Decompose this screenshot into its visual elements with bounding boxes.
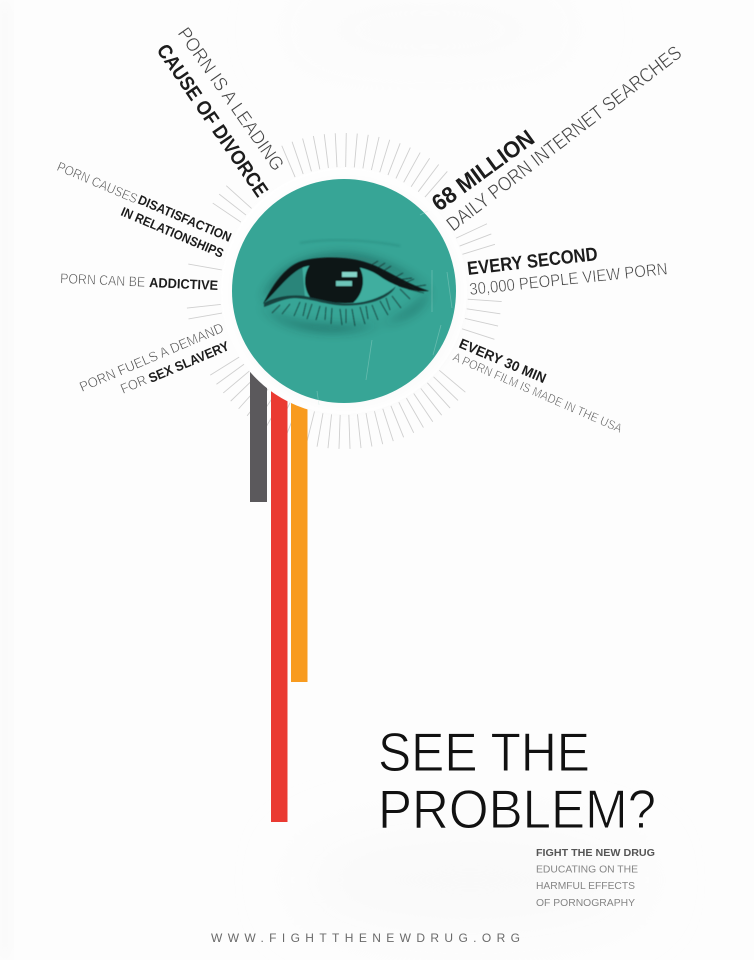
stat: addictive: PORN CAN BE: [60, 270, 145, 290]
stat: addictive: ADDICTIVE: [149, 275, 218, 293]
lashes: [272, 261, 426, 326]
organisation tagline: OF PORNOGRAPHY: [536, 897, 635, 909]
stat: every second: 30,000 PEOPLE VIEW PORN: [468, 259, 668, 299]
stat: sex slavery: FOR: [118, 371, 149, 397]
lower lid: [264, 286, 396, 307]
stat: every 30 min: A PORN FILM IS MADE IN THE USA: [451, 350, 625, 436]
organisation tagline: EDUCATING ON THE: [536, 864, 638, 876]
icon: eye: [262, 240, 432, 331]
stat: sex slavery: SEX SLAVERY: [146, 338, 231, 386]
organisation tagline: [536, 847, 655, 909]
website url: WWW.FIGHTTHENEWDRUG.ORG: [211, 931, 520, 945]
bar: gray: [250, 360, 267, 502]
title: PROBLEM?: [378, 778, 656, 840]
stat: porn is a leading cause of divorce: CAUSE OF DIVORCE: [152, 40, 272, 201]
drip bars: [250, 360, 308, 822]
stat: addictive: [60, 270, 218, 293]
organisation tagline: FIGHT THE NEW DRUG: [536, 847, 655, 859]
stat: 68 million: DAILY PORN INTERNET SEARCHES: [443, 42, 686, 236]
title: [378, 721, 656, 840]
upper lid: [263, 257, 429, 304]
disc scratches: [317, 211, 452, 405]
stat: dissatisfaction in relationships: PORN CAUSES: [55, 159, 140, 206]
bar: orange: [291, 395, 308, 682]
stat: dissatisfaction in relationships: [55, 159, 234, 261]
title: SEE THE: [378, 721, 590, 783]
bar: red: [271, 380, 288, 822]
stat: every second: EVERY SECOND: [466, 244, 599, 280]
radial tick marks: [187, 133, 502, 449]
stat: porn is a leading cause of divorce: PORN IS A LEADING: [173, 24, 288, 175]
stat: dissatisfaction in relationships: IN RELATIONSHIPS: [119, 204, 226, 261]
stat: 68 million: 68 MILLION: [427, 124, 539, 216]
stat: every second: [466, 244, 668, 299]
organisation tagline: HARMFUL EFFECTS: [536, 880, 635, 892]
stat: sex slavery: PORN FUELS A DEMAND: [77, 319, 226, 395]
stat: dissatisfaction in relationships: DISATISFACTION: [136, 192, 234, 245]
stat: every 30 min: EVERY 30 MIN: [457, 335, 549, 386]
teal eye disc: [232, 179, 456, 405]
